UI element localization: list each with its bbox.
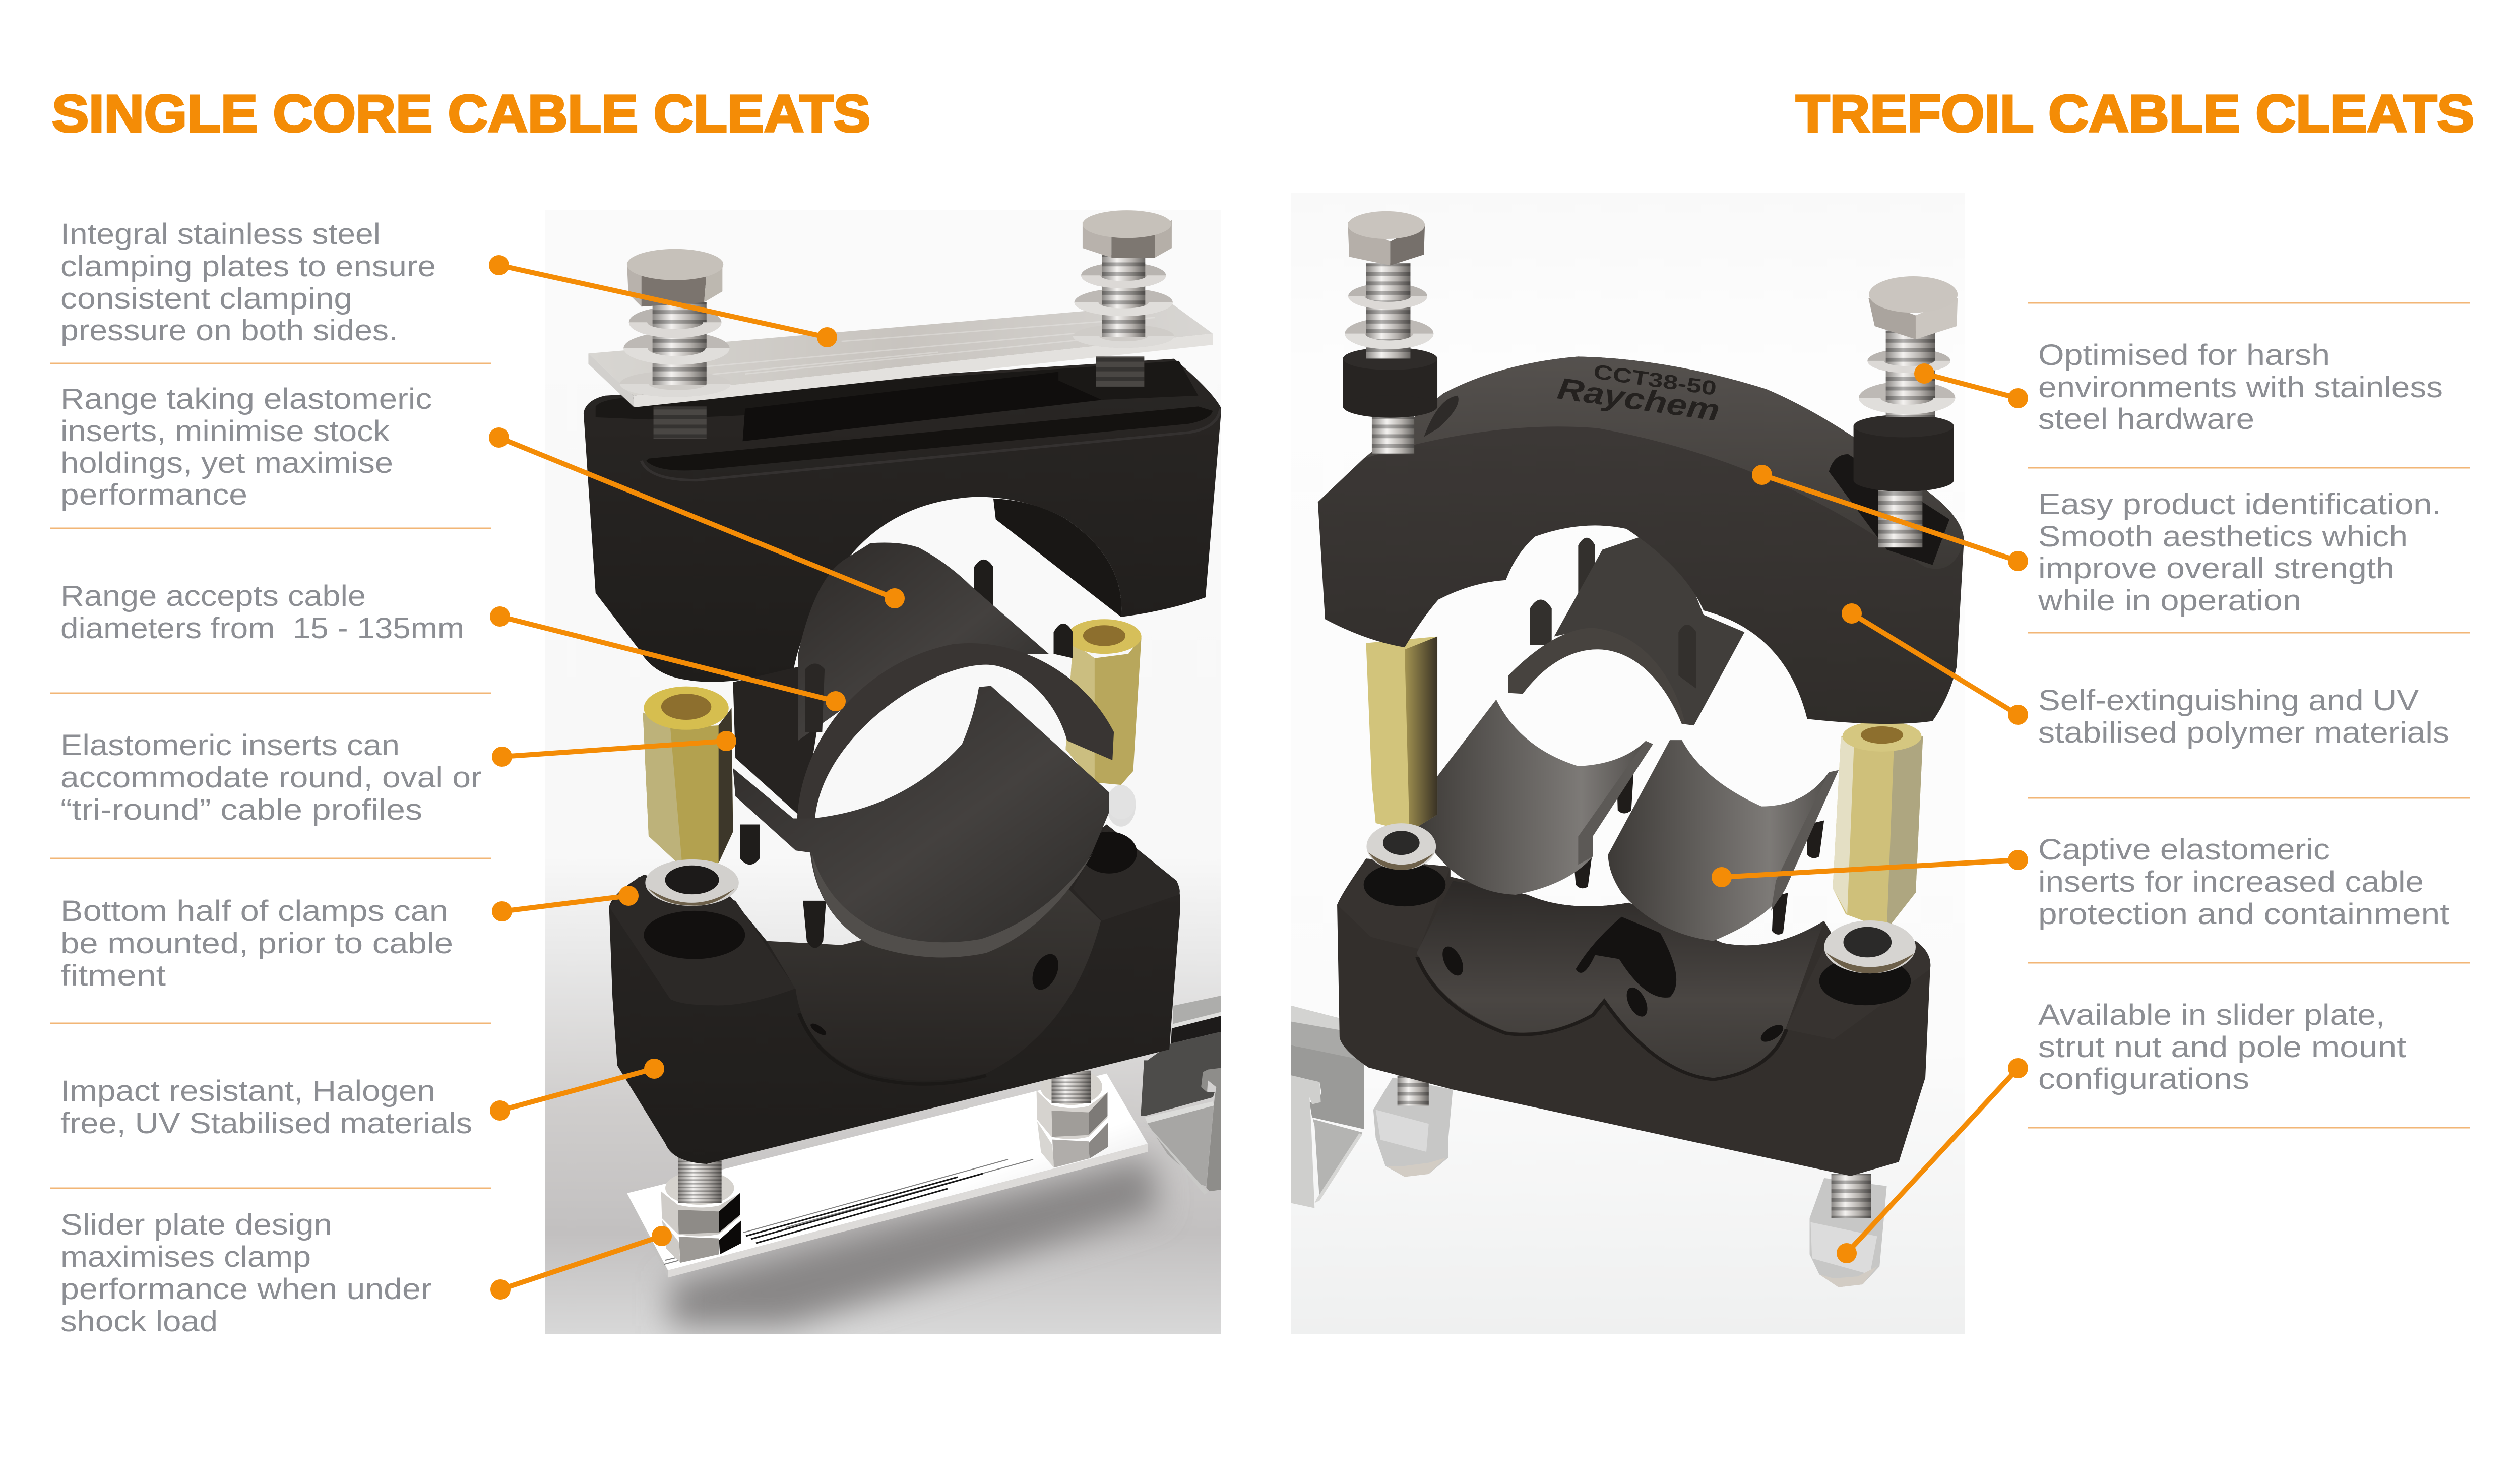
lower black clamp bbox=[1337, 858, 1930, 1176]
text: be mounted, prior to cable bbox=[60, 927, 453, 960]
text: accommodate round, oval or bbox=[60, 761, 482, 794]
connector line bbox=[500, 1236, 662, 1289]
top crown face bbox=[1364, 356, 1964, 569]
connector line bbox=[1722, 860, 2018, 877]
text: while in operation bbox=[2038, 584, 2301, 617]
text: holdings, yet maximise bbox=[60, 447, 393, 479]
connector line bbox=[502, 741, 726, 757]
text bbox=[2038, 833, 2449, 931]
pegs of upper insert bbox=[974, 560, 993, 606]
brushed streaks on slider plate bbox=[664, 1159, 1033, 1264]
t-nut, left bbox=[1373, 1076, 1453, 1177]
left callout 2: elastomeric inserts bbox=[60, 383, 905, 608]
connector dots bbox=[1837, 1058, 2028, 1263]
connector dots bbox=[492, 886, 639, 921]
connector dots bbox=[490, 1059, 664, 1121]
text: Elastomeric inserts can bbox=[60, 729, 400, 762]
text: Self-extinguishing and UV bbox=[2038, 684, 2419, 717]
top pad, right bbox=[1073, 824, 1180, 921]
left callout 7: slider plate bbox=[60, 1208, 672, 1338]
connector line bbox=[502, 896, 628, 911]
top pad, left bbox=[1337, 858, 1451, 949]
text: inserts for increased cable bbox=[2038, 866, 2424, 898]
connector dots bbox=[1842, 603, 2028, 725]
text: protection and containment bbox=[2038, 898, 2449, 931]
lower slider plate bbox=[627, 1074, 1148, 1278]
text: Impact resistant, Halogen bbox=[60, 1075, 435, 1107]
clamp bowl bbox=[767, 889, 1101, 1081]
top steel clamping plate bbox=[588, 303, 1213, 407]
lower black clamp bbox=[609, 824, 1180, 1164]
connector line bbox=[1924, 374, 2018, 398]
brass standoff, left bbox=[1366, 637, 1437, 832]
text bbox=[60, 895, 453, 992]
right callout 4: captive inserts bbox=[1712, 833, 2449, 931]
connector line bbox=[1847, 1068, 2018, 1253]
left callout 1: clamping plates bbox=[60, 218, 837, 347]
text: inserts, minimise stock bbox=[60, 415, 390, 448]
upper black clamp bbox=[584, 359, 1221, 682]
text: maximises clamp bbox=[60, 1241, 311, 1273]
connector dots bbox=[1712, 850, 2028, 887]
brass standoff, right bbox=[1833, 721, 1923, 930]
text: pressure on both sides. bbox=[60, 314, 398, 347]
lower insert, right bbox=[1608, 740, 1839, 941]
text: “tri-round” cable profiles bbox=[60, 793, 422, 826]
top pad, left bbox=[609, 877, 796, 1006]
text: Range accepts cable bbox=[60, 580, 366, 612]
top face recess slots bbox=[596, 361, 1199, 419]
text: performance bbox=[60, 478, 247, 511]
bolt, left bbox=[620, 249, 731, 439]
strut channel rail bbox=[1141, 996, 1221, 1195]
connector dots bbox=[489, 427, 905, 608]
connector line bbox=[1762, 475, 2018, 561]
front nuts and thread, lower left bbox=[661, 1154, 741, 1263]
connector line bbox=[500, 1069, 654, 1111]
text bbox=[60, 1075, 472, 1140]
text: clamping plates to ensure bbox=[60, 250, 436, 283]
left pegs of lower inserts bbox=[1573, 772, 1824, 935]
connector dots bbox=[489, 255, 837, 347]
t-nut, right bbox=[1810, 1174, 1887, 1287]
embossed brand name: Raychem bbox=[1555, 372, 1722, 427]
connector dots bbox=[492, 731, 736, 767]
washer, left bbox=[1366, 823, 1436, 870]
rear nuts and thread, lower right bbox=[1036, 1069, 1108, 1167]
washer, right bbox=[1824, 920, 1916, 973]
connector line bbox=[499, 438, 895, 598]
text: Captive elastomeric bbox=[2038, 833, 2330, 866]
text: Smooth aesthetics which bbox=[2038, 520, 2408, 553]
left callout 3: cable diameters bbox=[60, 580, 846, 711]
lower locating pegs bbox=[740, 824, 826, 948]
bolt, right bbox=[1073, 210, 1174, 387]
upper black clamp bbox=[1318, 356, 1964, 724]
left callout 6: materials bbox=[60, 1059, 664, 1140]
connector dots bbox=[1752, 465, 2028, 571]
text bbox=[60, 580, 464, 645]
text: fitment bbox=[60, 959, 166, 992]
text: Easy product identification. bbox=[2038, 488, 2441, 521]
top pad, right bbox=[1786, 933, 1930, 1039]
text: diameters from 15 - 135mm bbox=[60, 612, 464, 645]
text: consistent clamping bbox=[60, 282, 352, 315]
lower insert, left bbox=[1414, 700, 1653, 895]
upper back insert with pegs bbox=[1508, 537, 1744, 725]
bolt, left bbox=[1343, 211, 1437, 454]
text: shock load bbox=[60, 1305, 218, 1338]
rear locating peg bbox=[1054, 624, 1073, 658]
text: Slider plate design bbox=[60, 1208, 332, 1241]
brass standoff, rear right bbox=[1065, 619, 1142, 827]
text: stabilised polymer materials bbox=[2038, 716, 2449, 749]
text bbox=[2038, 339, 2443, 436]
left callout 4: cable profiles bbox=[60, 729, 736, 826]
text: steel hardware bbox=[2038, 403, 2254, 436]
text: strut nut and pole mount bbox=[2038, 1031, 2406, 1064]
strut channel rail bbox=[1291, 1006, 1364, 1208]
washer, front left bbox=[645, 859, 739, 906]
left bolt pocket bbox=[1424, 396, 1459, 437]
connector dots bbox=[490, 1226, 672, 1300]
right callout 1: stainless hardware bbox=[1914, 339, 2443, 436]
washer, rear right bbox=[1107, 785, 1136, 819]
text: Bottom half of clamps can bbox=[60, 895, 448, 928]
right bolt pocket bbox=[1829, 454, 1949, 565]
connector line bbox=[500, 617, 836, 701]
twin clamp bowls bbox=[1417, 881, 1824, 1079]
text bbox=[60, 729, 482, 826]
text: environments with stainless bbox=[2038, 371, 2443, 404]
text: improve overall strength bbox=[2038, 552, 2395, 585]
connector dots bbox=[1914, 363, 2028, 408]
right callout 3: polymer materials bbox=[1842, 603, 2449, 749]
text bbox=[60, 1208, 432, 1338]
connector line bbox=[1852, 613, 2018, 715]
text: performance when under bbox=[60, 1273, 432, 1306]
inner arch surface bbox=[993, 499, 1121, 617]
text bbox=[2038, 488, 2441, 617]
text: configurations bbox=[2038, 1063, 2249, 1095]
embossed product code: CCT38-50 bbox=[1592, 360, 1718, 400]
text bbox=[2038, 684, 2449, 749]
panel: single core cleat exploded product view bbox=[545, 210, 1221, 1334]
text: Available in slider plate, bbox=[2038, 999, 2385, 1031]
text: Integral stainless steel bbox=[60, 218, 381, 251]
lower elastomeric insert bbox=[733, 686, 1109, 957]
text: free, UV Stabilised materials bbox=[60, 1107, 472, 1140]
title: single core cable cleats: SINGLE CORE CABLE CLEATS bbox=[52, 85, 870, 143]
bolt, right bbox=[1854, 276, 1958, 547]
text: Range taking elastomeric bbox=[60, 383, 432, 415]
panel: trefoil cleat exploded product view bbox=[1291, 193, 1965, 1334]
right callout 2: product identification bbox=[1752, 465, 2441, 617]
text: Optimised for harsh bbox=[2038, 339, 2330, 372]
title: trefoil cable cleats: TREFOIL CABLE CLEATS bbox=[1796, 85, 2474, 143]
left callout 5: bottom half mounting bbox=[60, 886, 639, 992]
connector dots bbox=[490, 606, 846, 711]
connector line bbox=[499, 265, 827, 337]
right callout 5: mounting configurations bbox=[1837, 999, 2406, 1263]
text bbox=[2038, 999, 2406, 1095]
brass standoff, front left bbox=[643, 687, 733, 868]
text bbox=[60, 383, 432, 511]
text bbox=[60, 218, 436, 347]
upper elastomeric insert bbox=[733, 542, 1114, 820]
